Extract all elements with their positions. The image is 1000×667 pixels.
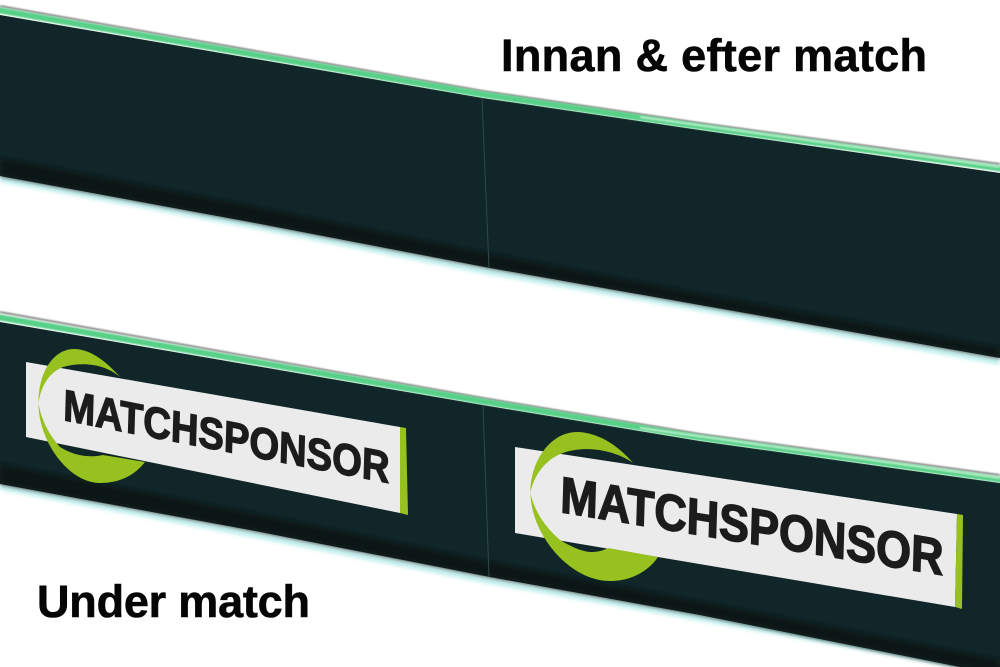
seam	[482, 98, 489, 268]
panel: top board, before and after match	[0, 6, 1000, 362]
logo crescent	[530, 432, 658, 581]
green top edge	[0, 318, 1000, 480]
logo crescent	[38, 349, 145, 483]
board surface	[0, 15, 1000, 358]
sponsor sign: left	[26, 349, 408, 515]
green top edge	[0, 10, 1000, 168]
sign background	[26, 362, 400, 513]
sponsor sign: right	[515, 432, 963, 609]
sponsor name: MATCHSPONSOR	[560, 466, 944, 586]
sign background	[515, 447, 957, 607]
panel: bottom board, during match	[0, 312, 1000, 667]
sign green edge	[400, 427, 408, 515]
heading: before and after match: Innan & efter match	[501, 30, 927, 81]
heading: during match: Under match	[37, 576, 310, 627]
board surface	[0, 322, 1000, 667]
sign green edge	[955, 514, 963, 609]
seam	[483, 405, 489, 577]
sponsor name: MATCHSPONSOR	[63, 381, 390, 493]
